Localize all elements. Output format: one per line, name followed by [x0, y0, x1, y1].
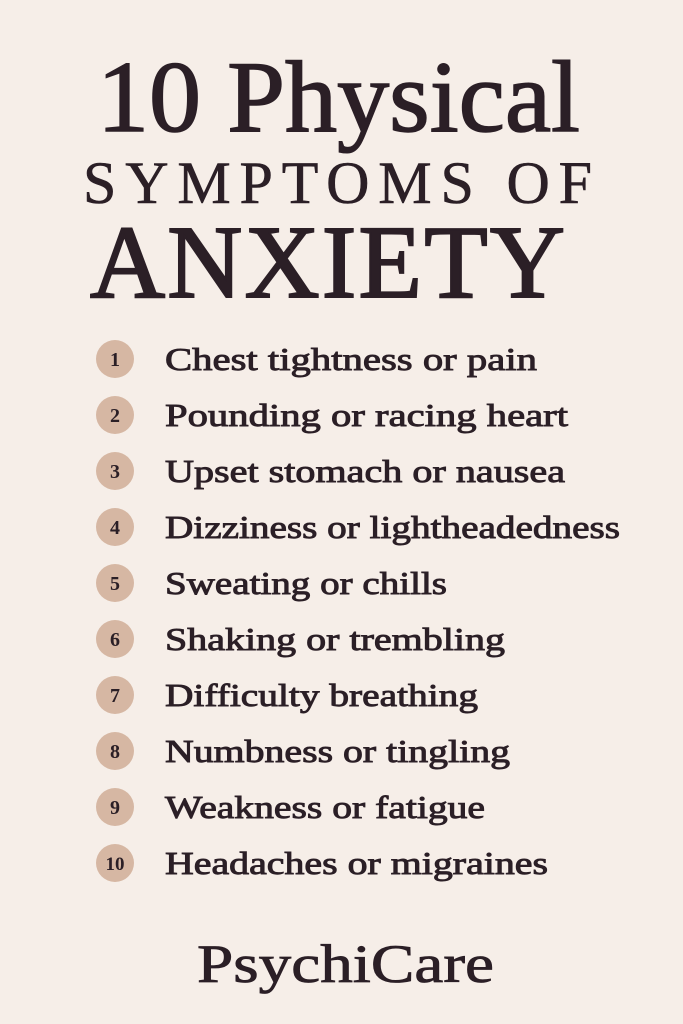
item 6 — [96, 620, 505, 658]
item 10 — [96, 844, 548, 882]
item 6: 6 — [110, 629, 120, 651]
item 1: Chest tightness or pain — [165, 341, 537, 377]
title line 3: ANXIETY — [90, 205, 565, 320]
item 2: Pounding or racing heart — [165, 397, 568, 433]
item 5: 5 — [110, 573, 120, 595]
item 7: 7 — [110, 685, 120, 707]
item 3: Upset stomach or nausea — [165, 453, 565, 489]
item 5 — [96, 564, 447, 602]
item 5: Sweating or chills — [165, 565, 447, 601]
item 4 — [96, 508, 620, 546]
item 7 — [96, 676, 478, 714]
title line 2: SYMPTOMS OF — [83, 150, 592, 216]
brand name: PsychiCare — [197, 934, 494, 994]
title line 1: 10 Physical — [97, 41, 580, 154]
item 9: 9 — [110, 797, 120, 819]
item 4: Dizziness or lightheadedness — [165, 509, 620, 545]
item 9: Weakness or fatigue — [165, 789, 485, 825]
item 10: 10 — [106, 854, 124, 875]
symptom list — [96, 340, 620, 882]
item 2: 2 — [110, 405, 120, 427]
item 9 — [96, 788, 485, 826]
item 2 — [96, 396, 568, 434]
item 3 — [96, 452, 565, 490]
title — [83, 41, 592, 320]
item 4: 4 — [110, 517, 120, 539]
item 10: Headaches or migraines — [165, 845, 548, 881]
item 3: 3 — [110, 461, 120, 483]
item 8: Numbness or tingling — [165, 733, 510, 769]
item 6: Shaking or trembling — [165, 621, 505, 657]
item 8 — [96, 732, 510, 770]
item 1: 1 — [110, 349, 120, 371]
item 7: Difficulty breathing — [165, 677, 478, 713]
item 8: 8 — [110, 741, 120, 763]
item 1 — [96, 340, 537, 378]
